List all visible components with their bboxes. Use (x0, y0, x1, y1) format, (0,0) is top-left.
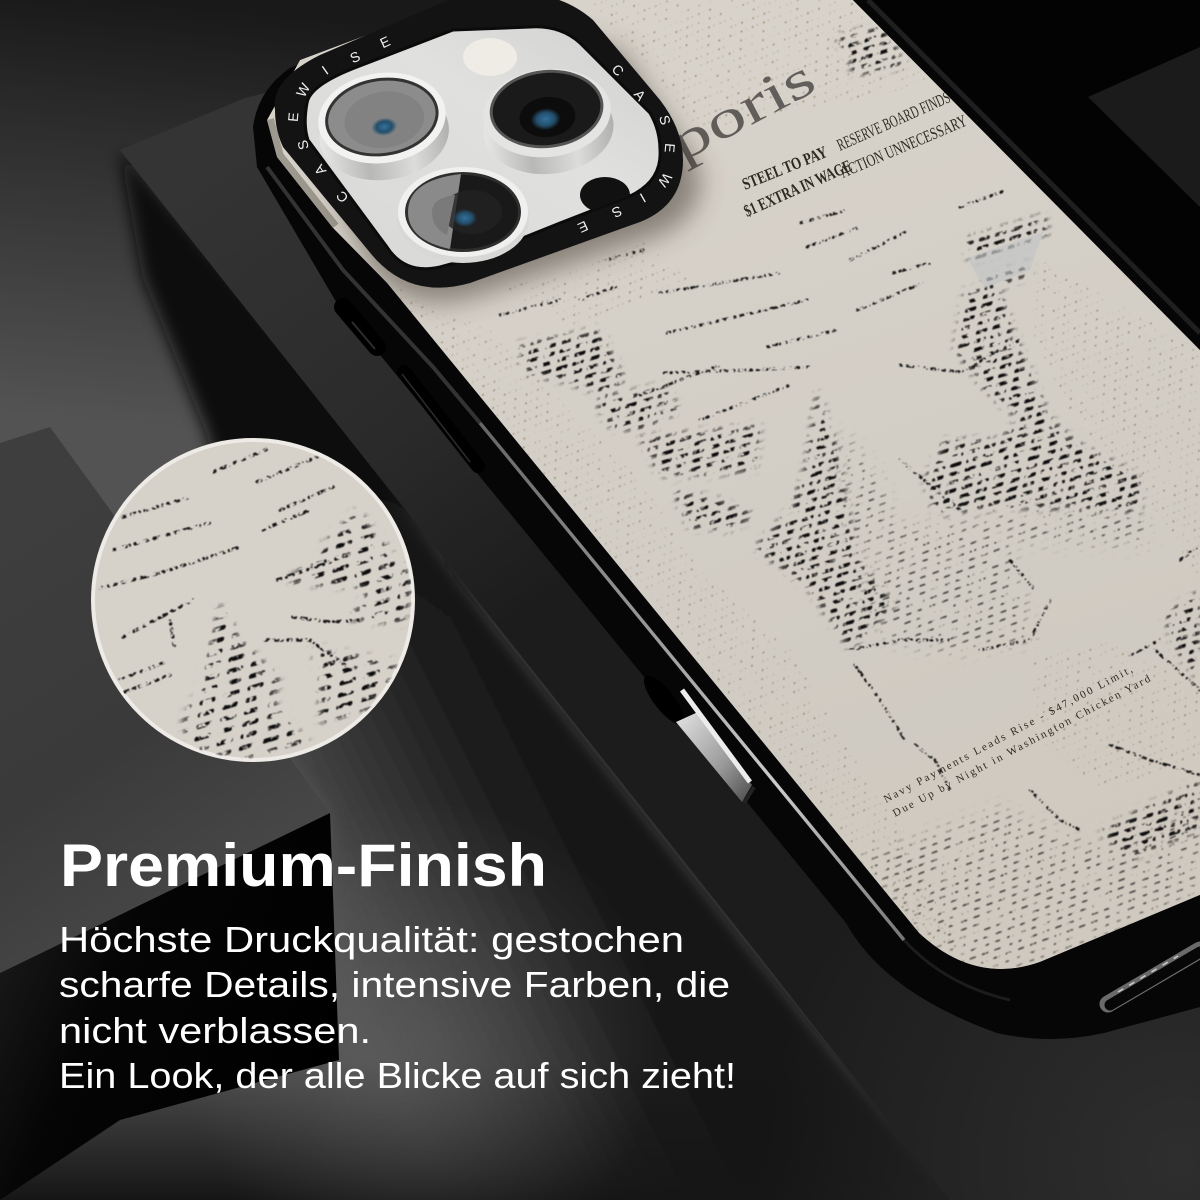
newspaper: dark halftone leaves (516, 25, 1200, 862)
lens: upper right (478, 62, 618, 180)
bezel lettering: CASEWISE: A (631, 86, 650, 104)
lens: upper left (311, 64, 455, 188)
lens: lower centre (397, 167, 529, 263)
bezel lettering: CASEWISE: W (654, 170, 675, 191)
newspaper: scattered text lines (500, 190, 1200, 830)
detail: enlarged text lines (100, 448, 363, 692)
flash (463, 38, 517, 76)
camera island shadow (300, 20, 700, 303)
bezel lettering: CASEWISE: A (310, 161, 329, 178)
newspaper headline: poris: poris (659, 47, 824, 173)
newspaper headlines: small print: $1 EXTRA IN WAGE (741, 156, 855, 221)
newspaper: grey photo patch (967, 232, 1043, 288)
bezel lettering: CASEWISE: I (319, 62, 331, 78)
bezel lettering: CASEWISE: E (575, 218, 591, 236)
bezel lettering: CASEWISE: E (377, 33, 393, 51)
bezel lettering: CASEWISE: E (662, 143, 678, 153)
bezel lettering: CASEWISE: I (637, 190, 649, 206)
body text: Höchste Druckqualität: gestochen (59, 919, 684, 960)
body text: Ein Look, der alle Blicke auf sich zieht! (59, 1055, 736, 1096)
microphone cut-out (580, 177, 630, 213)
newspaper: light brown dot columns (387, 0, 1200, 950)
bezel lettering: CASEWISE: S (609, 203, 625, 221)
title: Premium-Finish (60, 832, 547, 899)
side button: metallic power button (638, 670, 754, 803)
magnified detail circle (90, 440, 420, 760)
detail: enlarged halftone print (178, 506, 412, 759)
bezel lettering: CASEWISE: S (294, 138, 312, 152)
bezel lettering: CASEWISE (285, 33, 678, 236)
body text: scharfe Details, intensive Farben, die (59, 964, 730, 1005)
bezel lettering: CASEWISE: S (347, 48, 363, 66)
camera bezel ring (275, 0, 683, 288)
side button: mute switch (343, 307, 377, 349)
bezel lettering: CASEWISE: S (656, 113, 674, 127)
newspaper headlines: small print: ACTION UNNECESSARY (837, 111, 970, 182)
newspaper headlines: small print: Navy Payments Leads Rise - $47,000 Limit, (882, 663, 1135, 806)
body text (59, 919, 736, 1096)
camera glass plate (305, 27, 660, 269)
newspaper headlines: small print: STEEL TO PAY (739, 142, 830, 194)
phone back: newspaper print panel (267, 0, 1200, 969)
bezel lettering: CASEWISE: E (285, 112, 301, 122)
phone case body (253, 0, 1200, 1039)
bezel lettering: CASEWISE: C (333, 188, 351, 206)
camera island (275, 0, 683, 288)
bottom charging port (1108, 950, 1200, 1005)
bezel lettering: CASEWISE: W (293, 80, 314, 100)
newspaper headlines: small print: Due Up by Night in Washington Chicken Yard (891, 673, 1153, 820)
newspaper headlines: small print: RESERVE BOARD FINDS (834, 88, 953, 155)
newspaper: medium grey text tone (834, 430, 1200, 968)
newspaper headlines: small print (739, 88, 1153, 820)
bezel lettering: CASEWISE: C (609, 61, 627, 79)
side button: volume groove (402, 372, 478, 466)
body text: nicht verblassen. (59, 1010, 371, 1051)
